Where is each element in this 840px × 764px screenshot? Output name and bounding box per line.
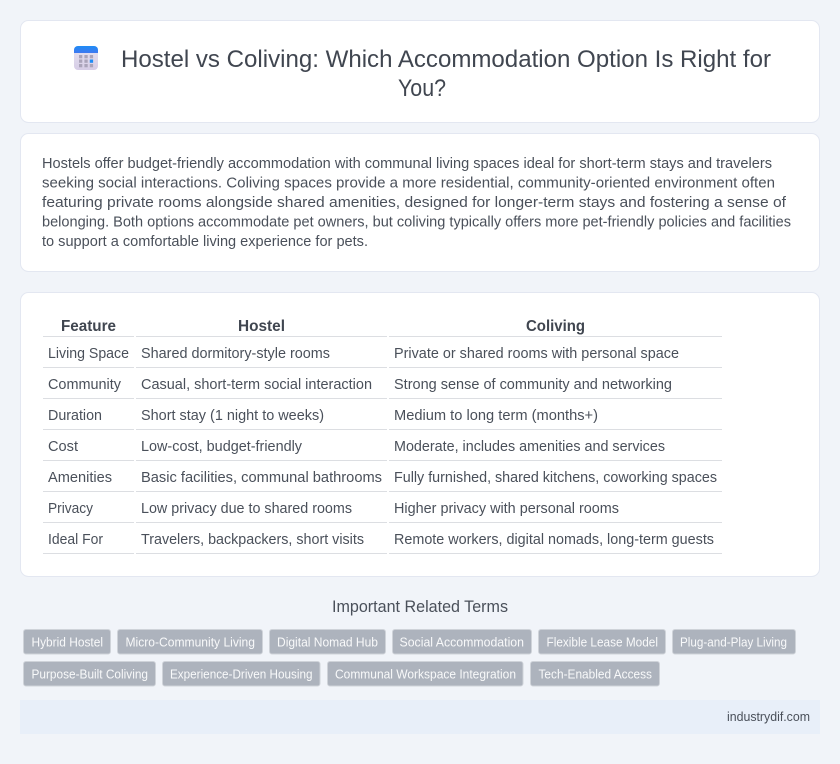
row: Ideal For: Ideal For bbox=[48, 532, 103, 548]
tag: Purpose-Built Coliving bbox=[32, 668, 148, 682]
text block: introduction paragraph: Hostels offer budget-friendly accommodation with communal living spaces ideal for short-term stays and travelers bbox=[42, 155, 772, 172]
tag: Social Accommodation bbox=[400, 636, 524, 650]
tag: Plug-and-Play Living bbox=[680, 636, 787, 650]
row: Duration: Medium to long term (months+) bbox=[394, 408, 598, 424]
title bbox=[121, 46, 771, 102]
row: Cost: Low-cost, budget-friendly bbox=[141, 439, 303, 455]
tag: Hybrid Hostel bbox=[32, 636, 103, 650]
row: Privacy bbox=[48, 501, 619, 517]
footer: industrydif.com bbox=[727, 709, 810, 724]
row: Duration bbox=[48, 408, 598, 424]
row: Living Space: Shared dormitory-style rooms bbox=[141, 346, 330, 362]
row: Privacy: Higher privacy with personal rooms bbox=[394, 501, 619, 517]
row: Duration: Short stay (1 night to weeks) bbox=[141, 408, 324, 424]
table header: Hostel bbox=[238, 318, 285, 335]
row: Cost bbox=[48, 439, 665, 455]
text block: introduction paragraph: seeking social interactions. Coliving spaces provide a more residential, community-oriented environment often bbox=[42, 174, 775, 192]
row: Ideal For bbox=[48, 532, 714, 548]
tag bbox=[672, 630, 796, 654]
row: Amenities: Amenities bbox=[48, 470, 112, 486]
row: Community: Casual, short-term social interaction bbox=[141, 377, 372, 393]
row: Community: Strong sense of community and networking bbox=[394, 377, 672, 393]
table rows bbox=[48, 346, 717, 548]
row: Privacy: Privacy bbox=[48, 501, 94, 517]
tag bbox=[538, 630, 666, 654]
row: Duration: Duration bbox=[48, 408, 102, 424]
tag bbox=[118, 630, 262, 654]
tag bbox=[24, 630, 110, 654]
row: Cost: Cost bbox=[48, 439, 78, 455]
tag bbox=[270, 630, 386, 654]
table header: Coliving bbox=[526, 318, 585, 335]
row: Amenities: Basic facilities, communal bathrooms bbox=[141, 470, 382, 486]
row: Ideal For: Remote workers, digital nomads, long-term guests bbox=[394, 532, 714, 548]
row: Living Space: Private or shared rooms with personal space bbox=[394, 346, 679, 362]
text block: introduction paragraph: to support a comfortable living experience for pets. bbox=[42, 233, 368, 250]
tag bbox=[530, 662, 660, 686]
panel: introduction bbox=[20, 134, 820, 272]
panel: title header bbox=[20, 20, 820, 122]
tags: related terms bbox=[24, 630, 796, 686]
panel: comparison table bbox=[20, 292, 820, 576]
tag bbox=[24, 662, 156, 686]
heading: related terms: Important Related Terms bbox=[332, 598, 508, 616]
title: Hostel vs Coliving: Which Accommodation Option Is Right for bbox=[121, 46, 771, 73]
text block: introduction paragraph: featuring private rooms alongside shared amenities, designed for longer-term stays and fostering a sense of bbox=[42, 194, 787, 211]
tag: Flexible Lease Model bbox=[546, 636, 658, 650]
row: Amenities: Fully furnished, shared kitchens, coworking spaces bbox=[394, 470, 717, 486]
row: Ideal For: Travelers, backpackers, short visits bbox=[141, 532, 364, 548]
tag bbox=[162, 662, 320, 686]
row: Community bbox=[48, 377, 672, 393]
row: Amenities bbox=[48, 470, 717, 486]
footer bbox=[20, 700, 820, 734]
text block: introduction paragraph bbox=[42, 155, 791, 250]
tag: Digital Nomad Hub bbox=[277, 636, 378, 650]
table header: Feature bbox=[61, 318, 116, 335]
table header bbox=[61, 318, 585, 335]
text block: introduction paragraph: belonging. Both options accommodate pet owners, but coliving typically offers more pet-friendly policies and facilities bbox=[42, 214, 791, 230]
row: Cost: Moderate, includes amenities and services bbox=[394, 439, 665, 455]
tag: Micro-Community Living bbox=[126, 636, 255, 650]
tag bbox=[392, 630, 532, 654]
tag: Experience-Driven Housing bbox=[170, 668, 312, 682]
row: Living Space bbox=[48, 346, 679, 362]
title: You? bbox=[398, 75, 446, 102]
row: Privacy: Low privacy due to shared rooms bbox=[141, 501, 352, 517]
tag: Communal Workspace Integration bbox=[335, 668, 516, 682]
tag: Tech-Enabled Access bbox=[538, 668, 652, 682]
tag bbox=[328, 662, 523, 686]
row: Community: Community bbox=[48, 377, 122, 393]
row: Living Space: Living Space bbox=[48, 346, 129, 362]
icon: calendar bbox=[74, 46, 98, 70]
